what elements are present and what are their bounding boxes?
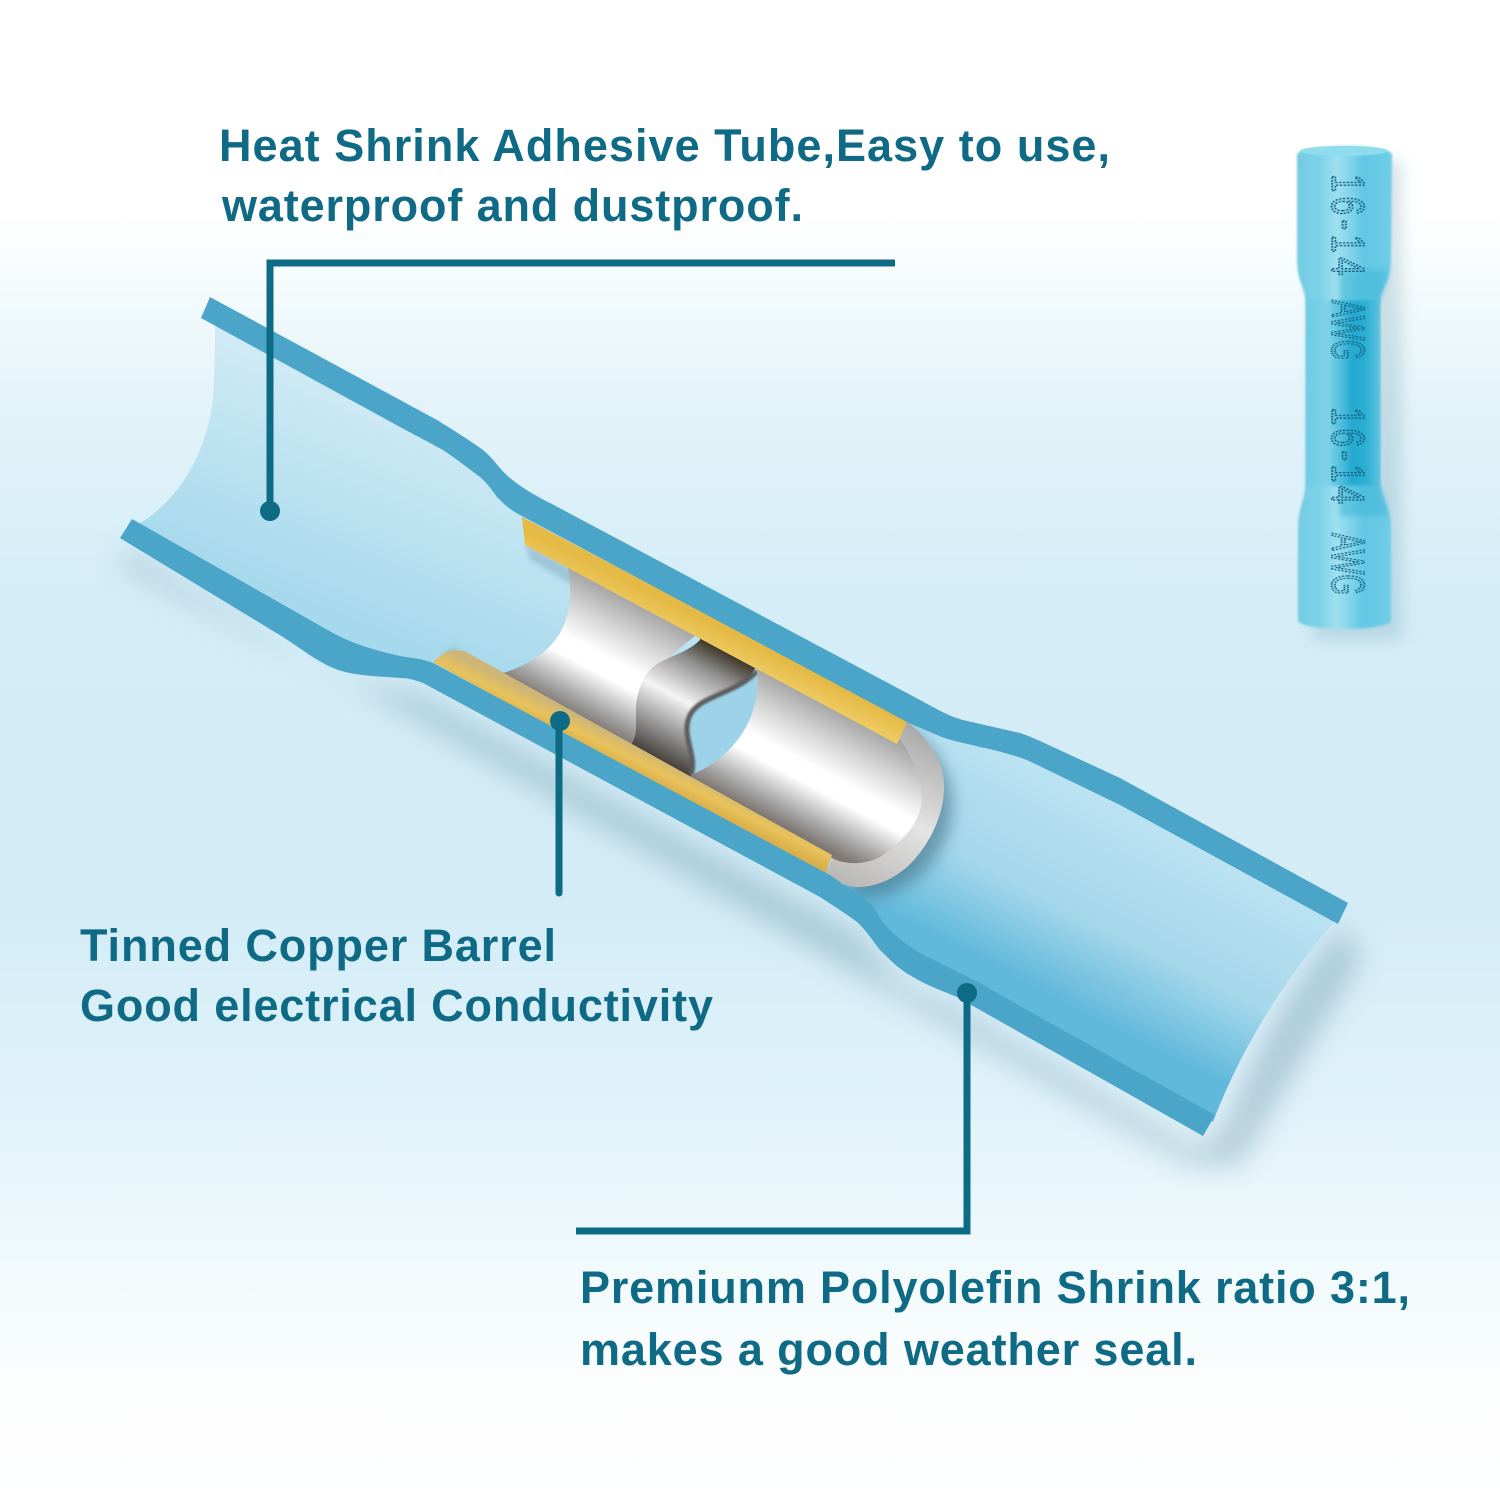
tube interior left	[132, 322, 906, 885]
callout: heat shrink adhesive tube	[260, 263, 895, 521]
connector marking text: 16-14	[1322, 174, 1372, 276]
connector marking text	[1322, 174, 1374, 595]
tube wall bottom	[120, 519, 1215, 1136]
yellow adhesive sleeve top	[522, 517, 908, 744]
heading: premium polyolefin: Premiunm Polyolefin Shrink ratio 3:1,	[580, 1262, 1410, 1313]
heading: tinned copper barrel: Good electrical Conductivity	[80, 980, 713, 1031]
callout: polyolefin	[576, 983, 977, 1231]
tube interior right	[840, 715, 1340, 1122]
heading: heat shrink adhesive tube	[219, 120, 1110, 231]
connector marking text: AWG	[1322, 300, 1374, 360]
tube wall top	[201, 297, 1348, 924]
metal barrel shadow	[850, 725, 952, 898]
connector marking text: 16-14	[1322, 407, 1372, 504]
callout: tinned copper barrel	[550, 711, 570, 893]
heading: tinned copper barrel: Tinned Copper Barrel	[80, 920, 556, 971]
heading: tinned copper barrel	[80, 920, 713, 1031]
connector marking text: AWG	[1322, 533, 1374, 595]
yellow adhesive sleeve bottom	[433, 650, 832, 878]
heading: premium polyolefin	[580, 1262, 1410, 1375]
diagram: cutaway connector	[120, 297, 1360, 1165]
tinned copper barrel	[503, 563, 944, 887]
heading: heat shrink adhesive tube: Heat Shrink Adhesive Tube,Easy to use,	[219, 120, 1110, 171]
icon: finished connector photo	[1297, 146, 1402, 640]
heading: premium polyolefin: makes a good weather seal.	[580, 1324, 1197, 1375]
heading: heat shrink adhesive tube: waterproof and dustproof.	[221, 180, 803, 231]
yellow sleeve soft shadows	[440, 543, 600, 673]
